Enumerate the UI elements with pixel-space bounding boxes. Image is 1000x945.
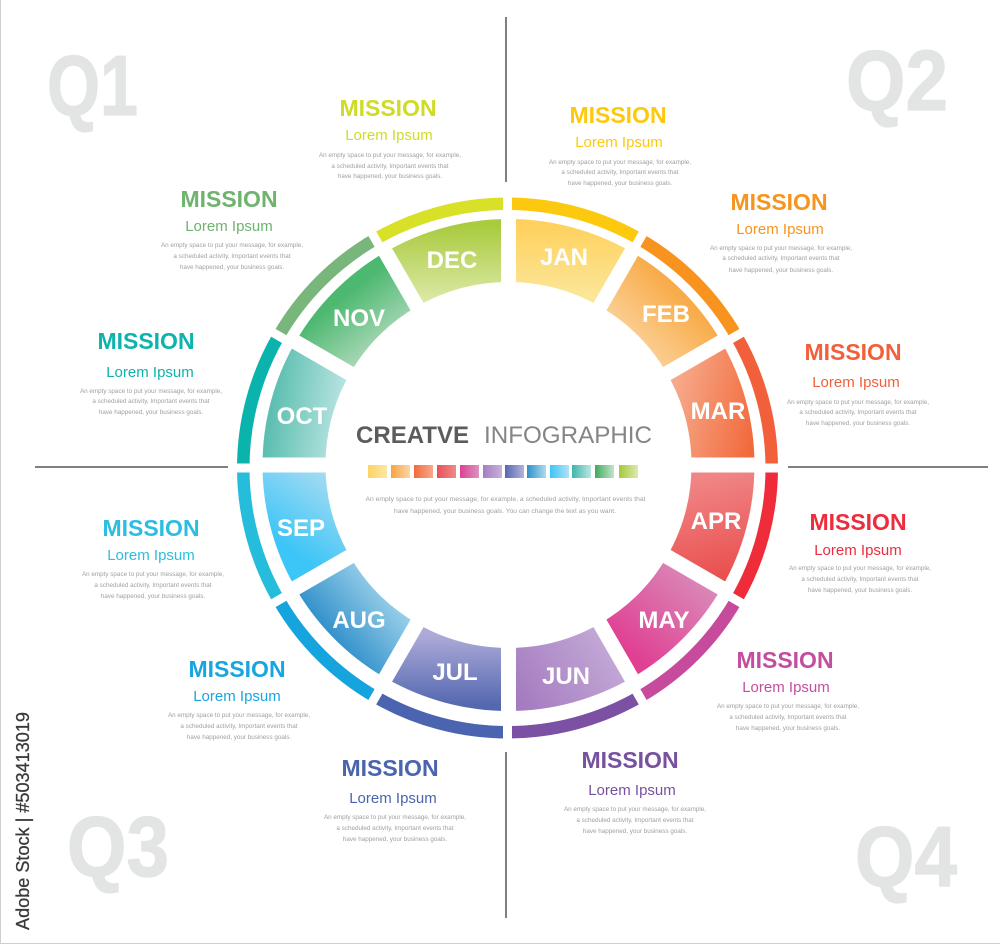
callout: APR mission: An empty space to put your message, for example, bbox=[789, 565, 931, 572]
wedge: AUG bbox=[295, 556, 417, 678]
callout: FEB mission: have happened, your business goals. bbox=[729, 267, 833, 274]
centre description: An empty space to put your message, for example, a scheduled activity, Important events that bbox=[366, 496, 646, 503]
callout: JAN mission: have happened, your business goals. bbox=[568, 180, 672, 187]
callout: OCT mission: have happened, your business goals. bbox=[99, 409, 203, 416]
callout: AUG mission: An empty space to put your message, for example, bbox=[168, 712, 310, 719]
callout: AUG mission: a scheduled activity, Important events that bbox=[180, 723, 298, 730]
callout: OCT mission: MISSION bbox=[97, 328, 195, 354]
month labels: JAN bbox=[540, 244, 588, 271]
callout: MAY mission: MISSION bbox=[736, 647, 834, 673]
callout: MAY mission: have happened, your business goals. bbox=[736, 725, 840, 732]
callout: APR mission: a scheduled activity, Important events that bbox=[801, 576, 919, 583]
callout: JUL mission: MISSION bbox=[341, 755, 439, 781]
callout: OCT mission bbox=[80, 328, 222, 416]
callout: NOV mission bbox=[161, 186, 303, 271]
callout: MAR mission bbox=[787, 339, 929, 427]
callout: MAR mission: a scheduled activity, Important events that bbox=[799, 409, 917, 416]
title: INFOGRAPHIC bbox=[484, 422, 652, 449]
callout: JUL mission bbox=[324, 755, 466, 843]
callout: JUN mission: MISSION bbox=[581, 747, 679, 773]
callout: MAY mission: a scheduled activity, Important events that bbox=[729, 714, 847, 721]
callout: JAN mission: Lorem Ipsum bbox=[575, 134, 663, 151]
month labels: DEC bbox=[427, 247, 477, 274]
label: Q3: Q3 bbox=[67, 800, 169, 895]
callout: AUG mission: Lorem Ipsum bbox=[193, 688, 281, 705]
wedge: MAY bbox=[600, 556, 722, 678]
callout: OCT mission: Lorem Ipsum bbox=[106, 364, 194, 381]
centre description bbox=[366, 496, 646, 515]
callout: JUN mission: Lorem Ipsum bbox=[588, 782, 676, 799]
callout: NOV mission: a scheduled activity, Important events that bbox=[173, 253, 291, 260]
callout: JUL mission: An empty space to put your message, for example, bbox=[324, 814, 466, 821]
month wedges bbox=[262, 219, 754, 711]
callout: NOV mission: have happened, your business goals. bbox=[180, 264, 284, 271]
month labels: JUL bbox=[432, 659, 478, 686]
label: Q4: Q4 bbox=[855, 810, 957, 905]
wedge: JUL bbox=[386, 623, 508, 711]
month labels: OCT bbox=[277, 403, 328, 430]
outer ring: twelve coloured arcs bbox=[243, 204, 772, 732]
callout: SEP mission: An empty space to put your message, for example, bbox=[82, 571, 224, 578]
wedge: NOV bbox=[295, 252, 417, 374]
month labels: FEB bbox=[642, 301, 690, 328]
callout: AUG mission: have happened, your business goals. bbox=[187, 734, 291, 741]
wedge: APR bbox=[667, 465, 754, 588]
callout: JUN mission: a scheduled activity, Important events that bbox=[576, 817, 694, 824]
wedge: JAN bbox=[508, 219, 632, 307]
label: Q2: Q2 bbox=[846, 34, 948, 129]
callout: MAY mission: Lorem Ipsum bbox=[742, 679, 830, 696]
callout: FEB mission: a scheduled activity, Important events that bbox=[722, 255, 840, 262]
callout: NOV mission: MISSION bbox=[180, 186, 278, 212]
month labels bbox=[277, 244, 745, 690]
label: Q1: Q1 bbox=[47, 39, 138, 134]
callout: FEB mission: MISSION bbox=[730, 189, 828, 215]
callout: FEB mission: An empty space to put your message, for example, bbox=[710, 245, 852, 252]
wedge: MAR bbox=[667, 342, 754, 465]
callout: JUN mission bbox=[564, 747, 706, 835]
callout: JAN mission: MISSION bbox=[569, 102, 667, 128]
callout: JAN mission: An empty space to put your message, for example, bbox=[549, 159, 691, 166]
wedge: SEP bbox=[262, 465, 350, 588]
callout: NOV mission: Lorem Ipsum bbox=[185, 218, 273, 235]
callout: APR mission: Lorem Ipsum bbox=[814, 542, 902, 559]
callout: APR mission: MISSION bbox=[809, 509, 907, 535]
callout: JUN mission: have happened, your business goals. bbox=[583, 828, 687, 835]
side caption: stock id: Adobe Stock | #503413019 bbox=[13, 712, 33, 930]
callout: FEB mission bbox=[710, 189, 852, 274]
callout: JUL mission: a scheduled activity, Important events that bbox=[336, 825, 454, 832]
callout: NOV mission: An empty space to put your message, for example, bbox=[161, 242, 303, 249]
month labels: JUN bbox=[542, 663, 590, 690]
callout: JAN mission: a scheduled activity, Important events that bbox=[561, 169, 679, 176]
month labels: AUG bbox=[332, 607, 386, 634]
callout: MAR mission: MISSION bbox=[804, 339, 902, 365]
callout: MAR mission: have happened, your business goals. bbox=[806, 420, 910, 427]
callout: SEP mission bbox=[82, 515, 224, 600]
callout: JUL mission: Lorem Ipsum bbox=[349, 790, 437, 807]
callout: MAR mission: Lorem Ipsum bbox=[812, 374, 900, 391]
title: CREATVE bbox=[356, 422, 469, 449]
month labels: MAR bbox=[691, 398, 745, 425]
callout: DEC mission: a scheduled activity, Important events that bbox=[331, 163, 449, 170]
month labels: MAY bbox=[638, 607, 690, 634]
callout: AUG mission bbox=[168, 656, 310, 741]
callout: DEC mission: Lorem Ipsum bbox=[345, 127, 433, 144]
callout: FEB mission: Lorem Ipsum bbox=[736, 221, 824, 238]
callout: MAY mission bbox=[717, 647, 859, 732]
callout: DEC mission: MISSION bbox=[339, 95, 437, 121]
callout: APR mission bbox=[789, 509, 931, 594]
callout: DEC mission: An empty space to put your message, for example, bbox=[319, 152, 461, 159]
title bbox=[356, 422, 652, 449]
callout: MAR mission: An empty space to put your message, for example, bbox=[787, 399, 929, 406]
centre block: title, palette and description bbox=[356, 422, 652, 515]
wedge: FEB bbox=[600, 252, 722, 374]
month labels: APR bbox=[691, 508, 741, 535]
callout: AUG mission: MISSION bbox=[188, 656, 286, 682]
wedge: DEC bbox=[386, 219, 508, 307]
wedge: OCT bbox=[262, 342, 350, 465]
colour palette strip bbox=[368, 465, 638, 478]
month labels: SEP bbox=[277, 515, 325, 542]
callout: OCT mission: An empty space to put your message, for example, bbox=[80, 388, 222, 395]
callout: SEP mission: MISSION bbox=[102, 515, 200, 541]
callout: OCT mission: a scheduled activity, Important events that bbox=[92, 398, 210, 405]
callout: JUL mission: have happened, your business goals. bbox=[343, 836, 447, 843]
callout: JAN mission bbox=[549, 102, 691, 187]
wedge: JUN bbox=[508, 623, 632, 711]
month labels: NOV bbox=[333, 305, 385, 332]
callout: APR mission: have happened, your business goals. bbox=[808, 587, 912, 594]
callout: SEP mission: Lorem Ipsum bbox=[107, 547, 195, 564]
centre description: have happened, your business goals. You can change the text as you want. bbox=[394, 508, 616, 515]
callout: SEP mission: a scheduled activity, Important events that bbox=[94, 582, 212, 589]
callout: SEP mission: have happened, your business goals. bbox=[101, 593, 205, 600]
callout: JUN mission: An empty space to put your message, for example, bbox=[564, 806, 706, 813]
callout: MAY mission: An empty space to put your message, for example, bbox=[717, 703, 859, 710]
callout: DEC mission: have happened, your business goals. bbox=[338, 173, 442, 180]
callout: DEC mission bbox=[319, 95, 461, 180]
